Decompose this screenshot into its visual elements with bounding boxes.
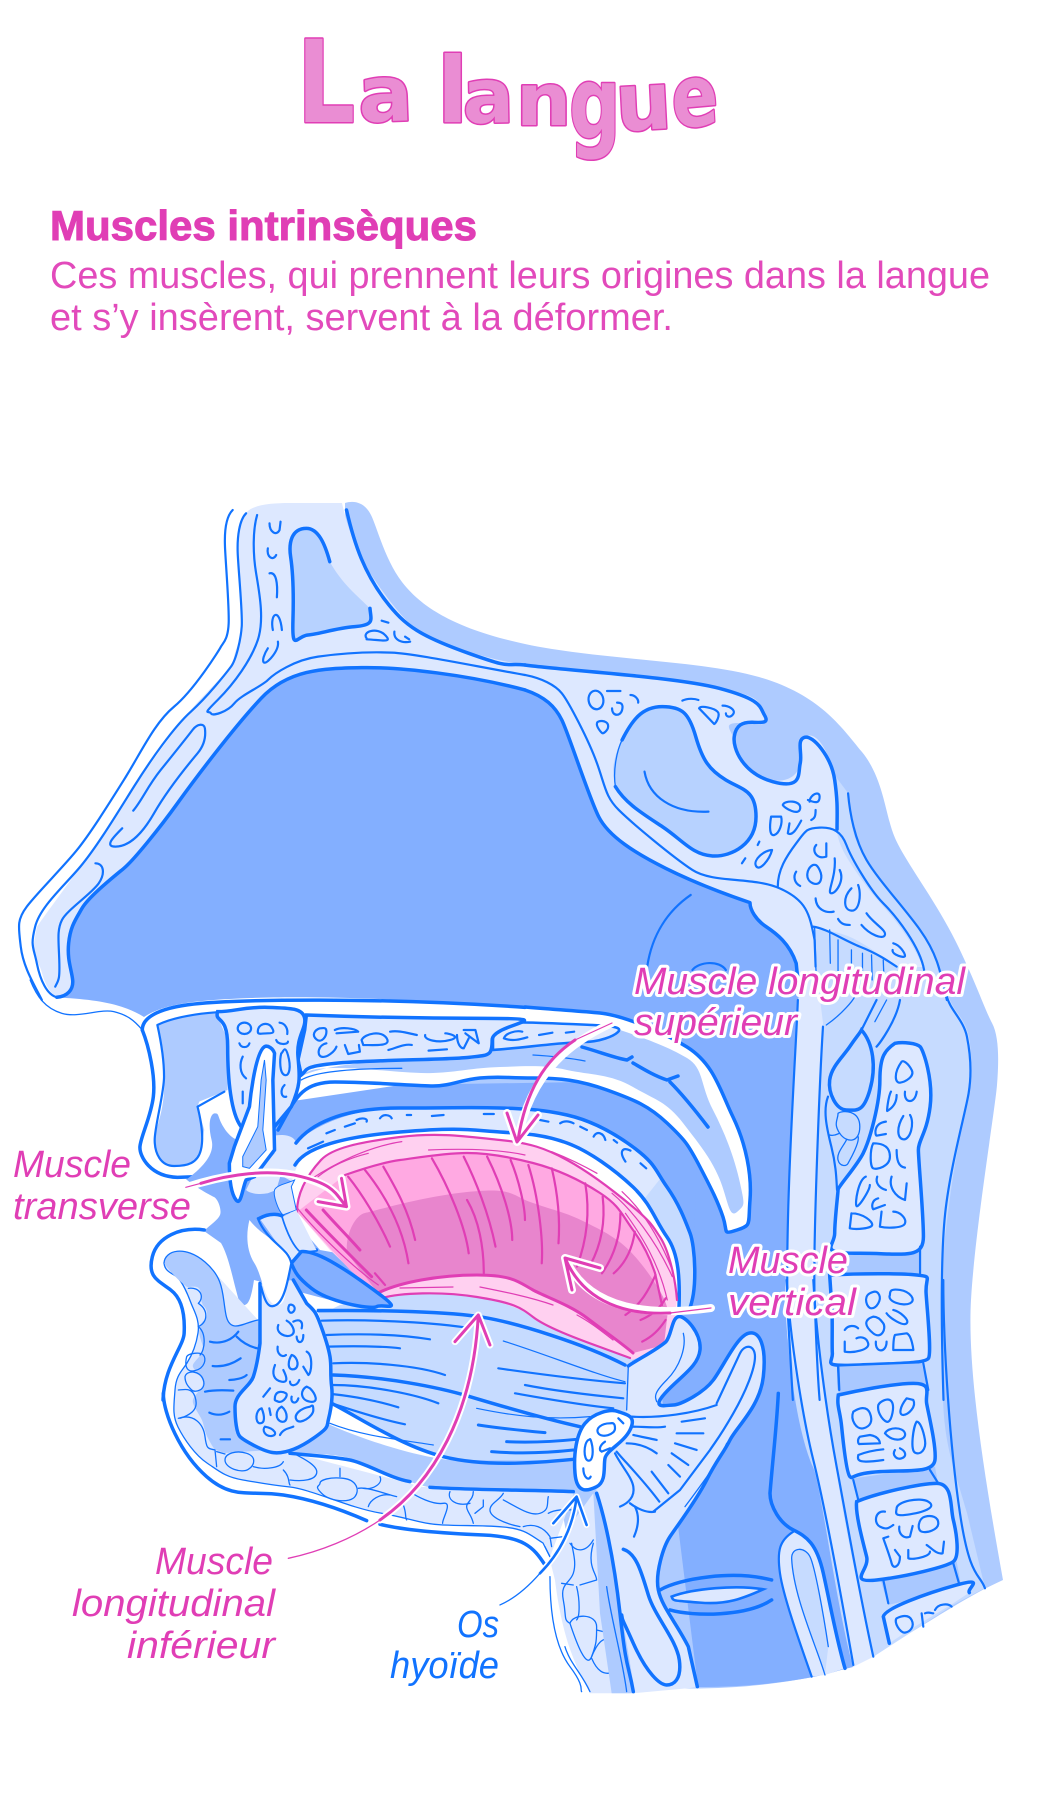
chin bbox=[164, 1251, 270, 1453]
title: e bbox=[669, 46, 721, 149]
heading: muscles intrinseques: Muscles intrinsèques bbox=[50, 202, 477, 249]
soft palate inner lines bbox=[533, 1047, 708, 1127]
mouth cavity bbox=[187, 1080, 700, 1345]
soft palate inner bbox=[298, 1030, 743, 1213]
arrow: muscle transverse bbox=[186, 1173, 347, 1207]
label: muscle vertical bbox=[728, 1240, 858, 1324]
hyoid bone bbox=[575, 1411, 632, 1490]
nasal and pharyngeal cavity bbox=[57, 668, 853, 1687]
label: muscle longitudinal inferieur: Muscle bbox=[155, 1541, 273, 1583]
label: os hyoide: hyoïde bbox=[390, 1645, 499, 1687]
vertebra five bbox=[883, 1582, 973, 1643]
arrow: muscle longitudinal superieur bbox=[507, 1023, 612, 1142]
mandible bbox=[235, 1280, 332, 1453]
front palate and upper lip bbox=[30, 980, 574, 1201]
label: muscle vertical: Muscle bbox=[728, 1240, 848, 1282]
anatomical diagram bbox=[19, 502, 1003, 1693]
skin silhouette bbox=[345, 502, 1003, 1693]
title: a bbox=[462, 51, 515, 141]
skull bone bbox=[33, 503, 923, 1667]
larynx and epiglottis bbox=[593, 1317, 772, 1693]
title: g bbox=[569, 45, 621, 162]
vertebra two bbox=[830, 1274, 930, 1365]
dark tab behind incisor bbox=[186, 1113, 238, 1180]
label: muscle longitudinal inferieur: inférieur bbox=[127, 1625, 276, 1667]
palate bbox=[140, 997, 750, 1232]
arrow: os hyoide bbox=[500, 1497, 587, 1605]
label: muscle vertical: vertical bbox=[728, 1282, 858, 1324]
label: muscle transverse: Muscle bbox=[13, 1144, 131, 1186]
tongue mucosa band bbox=[280, 1108, 695, 1320]
lower tongue bbox=[163, 1280, 632, 1565]
back of skull details bbox=[525, 665, 947, 1000]
intro text: Ces muscles, qui prennent leurs origines dans la langue bbox=[50, 255, 990, 297]
title: u bbox=[613, 53, 674, 150]
intro text: et s’y insèrent, servent à la déformer. bbox=[50, 297, 673, 339]
palate bone bar bbox=[298, 1015, 524, 1075]
arrow: muscle vertical bbox=[565, 1258, 711, 1313]
soft palate outline bbox=[278, 1007, 750, 1232]
lower lamina of tongue muscle bbox=[378, 1275, 633, 1358]
vertebra one bbox=[831, 1043, 931, 1254]
tongue muscle bbox=[290, 1129, 679, 1360]
spine and pharynx lower bbox=[770, 1280, 985, 1677]
title: L bbox=[297, 17, 355, 150]
title: l bbox=[437, 39, 468, 144]
arrow: muscle longitudinal inferieur bbox=[288, 1315, 490, 1558]
intro text bbox=[50, 255, 990, 339]
neck fat bbox=[550, 1493, 630, 1693]
label: os hyoide: Os bbox=[457, 1604, 499, 1646]
atlas bbox=[829, 1030, 873, 1110]
glottis bbox=[660, 1576, 772, 1590]
frenulum bbox=[291, 1252, 391, 1307]
title bbox=[297, 17, 721, 162]
label: muscle transverse bbox=[13, 1144, 191, 1228]
spine and vertebrae upper bbox=[787, 997, 970, 1400]
lower lip line and front teeth bbox=[151, 1180, 391, 1400]
esophagus bbox=[779, 1532, 845, 1677]
vertebra three bbox=[838, 1383, 935, 1478]
label: muscle longitudinal inferieur: longitudinal bbox=[72, 1583, 277, 1625]
vertebra four bbox=[856, 1483, 957, 1580]
spine backing bbox=[785, 773, 985, 1677]
nose and skull outlines bbox=[19, 510, 525, 1000]
title: n bbox=[516, 58, 571, 142]
label: muscle longitudinal superieur bbox=[634, 961, 967, 1044]
title: a bbox=[356, 48, 414, 141]
lower incisor bbox=[247, 1220, 291, 1305]
label: os hyoide bbox=[390, 1604, 499, 1687]
lower jaw base bbox=[164, 1251, 575, 1557]
label: muscle longitudinal superieur: Muscle longitudinal bbox=[634, 961, 967, 1003]
label: muscle transverse: transverse bbox=[13, 1186, 191, 1228]
label: muscle longitudinal superieur: supérieur bbox=[634, 1002, 798, 1044]
label: muscle longitudinal inferieur bbox=[72, 1541, 277, 1667]
palate bone tail bbox=[493, 1022, 619, 1050]
premaxilla bbox=[217, 1007, 305, 1127]
